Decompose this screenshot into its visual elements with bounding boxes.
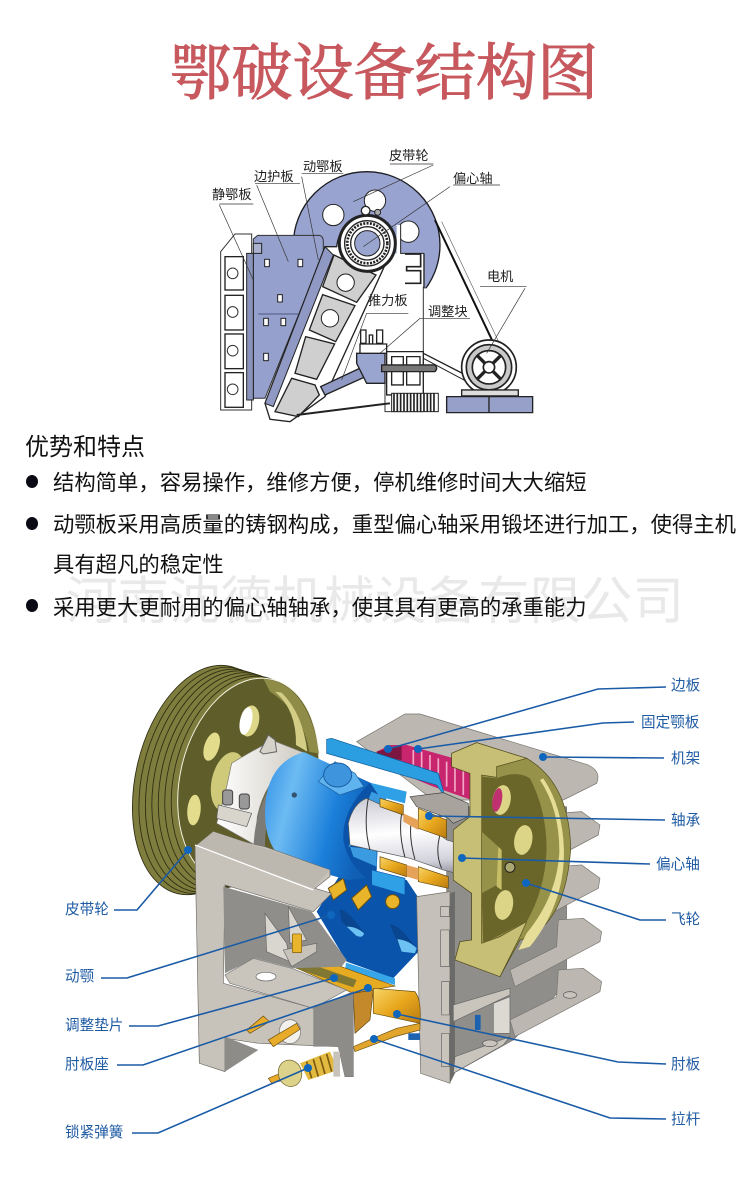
item 3: 采用更大更耐用的偏心轴轴承，使其具有更高的承重能力 xyxy=(53,596,587,620)
label: 动鄂板: 动鄂板 xyxy=(303,159,343,174)
swing jaw body xyxy=(317,875,420,985)
left frame wall xyxy=(195,832,353,1077)
bullet 1 xyxy=(26,475,38,488)
callout: 调整垫片: 调整垫片 xyxy=(65,1018,123,1034)
rear frame top plate and fins xyxy=(357,714,602,1073)
callout: 肘板: 肘板 xyxy=(671,1057,700,1073)
heading: advantages: 优势和特点 xyxy=(25,434,145,461)
belt wheel xyxy=(290,172,443,327)
side liner xyxy=(327,738,445,797)
swing jaw xyxy=(265,217,393,422)
motor with belt xyxy=(423,220,533,413)
frame right side xyxy=(385,287,423,412)
adjusting shim and toggle seat xyxy=(293,957,420,1052)
callout: 皮带轮: 皮带轮 xyxy=(65,902,109,918)
eccentric shaft xyxy=(348,798,497,883)
bullet 2 xyxy=(26,517,38,530)
shaft grooves xyxy=(366,798,442,868)
blue housing cylinder xyxy=(265,752,387,882)
callout: 锁紧弹簧: 锁紧弹簧 xyxy=(65,1125,123,1141)
leader lines xyxy=(219,164,527,380)
belt pulley xyxy=(111,651,339,909)
callout: 机架: 机架 xyxy=(671,751,700,767)
label: 调整块: 调整块 xyxy=(428,304,468,319)
bullet list xyxy=(26,471,736,620)
leader lines xyxy=(101,687,666,1133)
leader dots xyxy=(184,745,547,1072)
fixed jaw plate xyxy=(377,745,472,800)
item 2 continued: 具有超凡的稳定性 xyxy=(53,553,224,577)
side guard plate xyxy=(247,235,323,400)
item 2: 动颚板采用高质量的铸钢构成，重型偏心轴采用锻坯进行加工，使得主机 xyxy=(53,513,736,537)
callout: 肘板座: 肘板座 xyxy=(65,1057,109,1073)
eccentric shaft bearing xyxy=(339,206,395,271)
toggle plate and seat xyxy=(321,330,437,395)
label: 边护板: 边护板 xyxy=(254,169,294,184)
callout: 轴承: 轴承 xyxy=(671,813,700,829)
callout: 拉杆: 拉杆 xyxy=(671,1112,700,1128)
label: 偏心轴: 偏心轴 xyxy=(453,171,493,186)
label: 电机: 电机 xyxy=(487,269,513,284)
label: 推力板: 推力板 xyxy=(368,293,408,308)
callout: 固定颚板: 固定颚板 xyxy=(641,715,699,731)
callout: 动颚: 动颚 xyxy=(65,969,94,985)
callout: 偏心轴: 偏心轴 xyxy=(656,857,700,873)
right front column xyxy=(417,892,577,1083)
bearing cap hub xyxy=(217,735,304,853)
label: 静鄂板: 静鄂板 xyxy=(212,187,252,202)
flywheel xyxy=(452,743,571,977)
callout: 飞轮: 飞轮 xyxy=(671,912,700,928)
callout: 边板: 边板 xyxy=(671,678,700,694)
watermark: 河南沈德机械设备有限公司 xyxy=(66,572,684,630)
item 1: 结构简单，容易操作，维修方便，停机维修时间大大缩短 xyxy=(53,471,587,495)
bolts and lock spring xyxy=(247,1016,340,1089)
bullet 3 xyxy=(26,599,38,612)
spring xyxy=(297,393,438,415)
left frame xyxy=(221,234,252,410)
label: 皮带轮: 皮带轮 xyxy=(389,148,429,163)
title: 鄂破设备结构图 xyxy=(170,40,598,108)
bearings xyxy=(370,783,498,895)
